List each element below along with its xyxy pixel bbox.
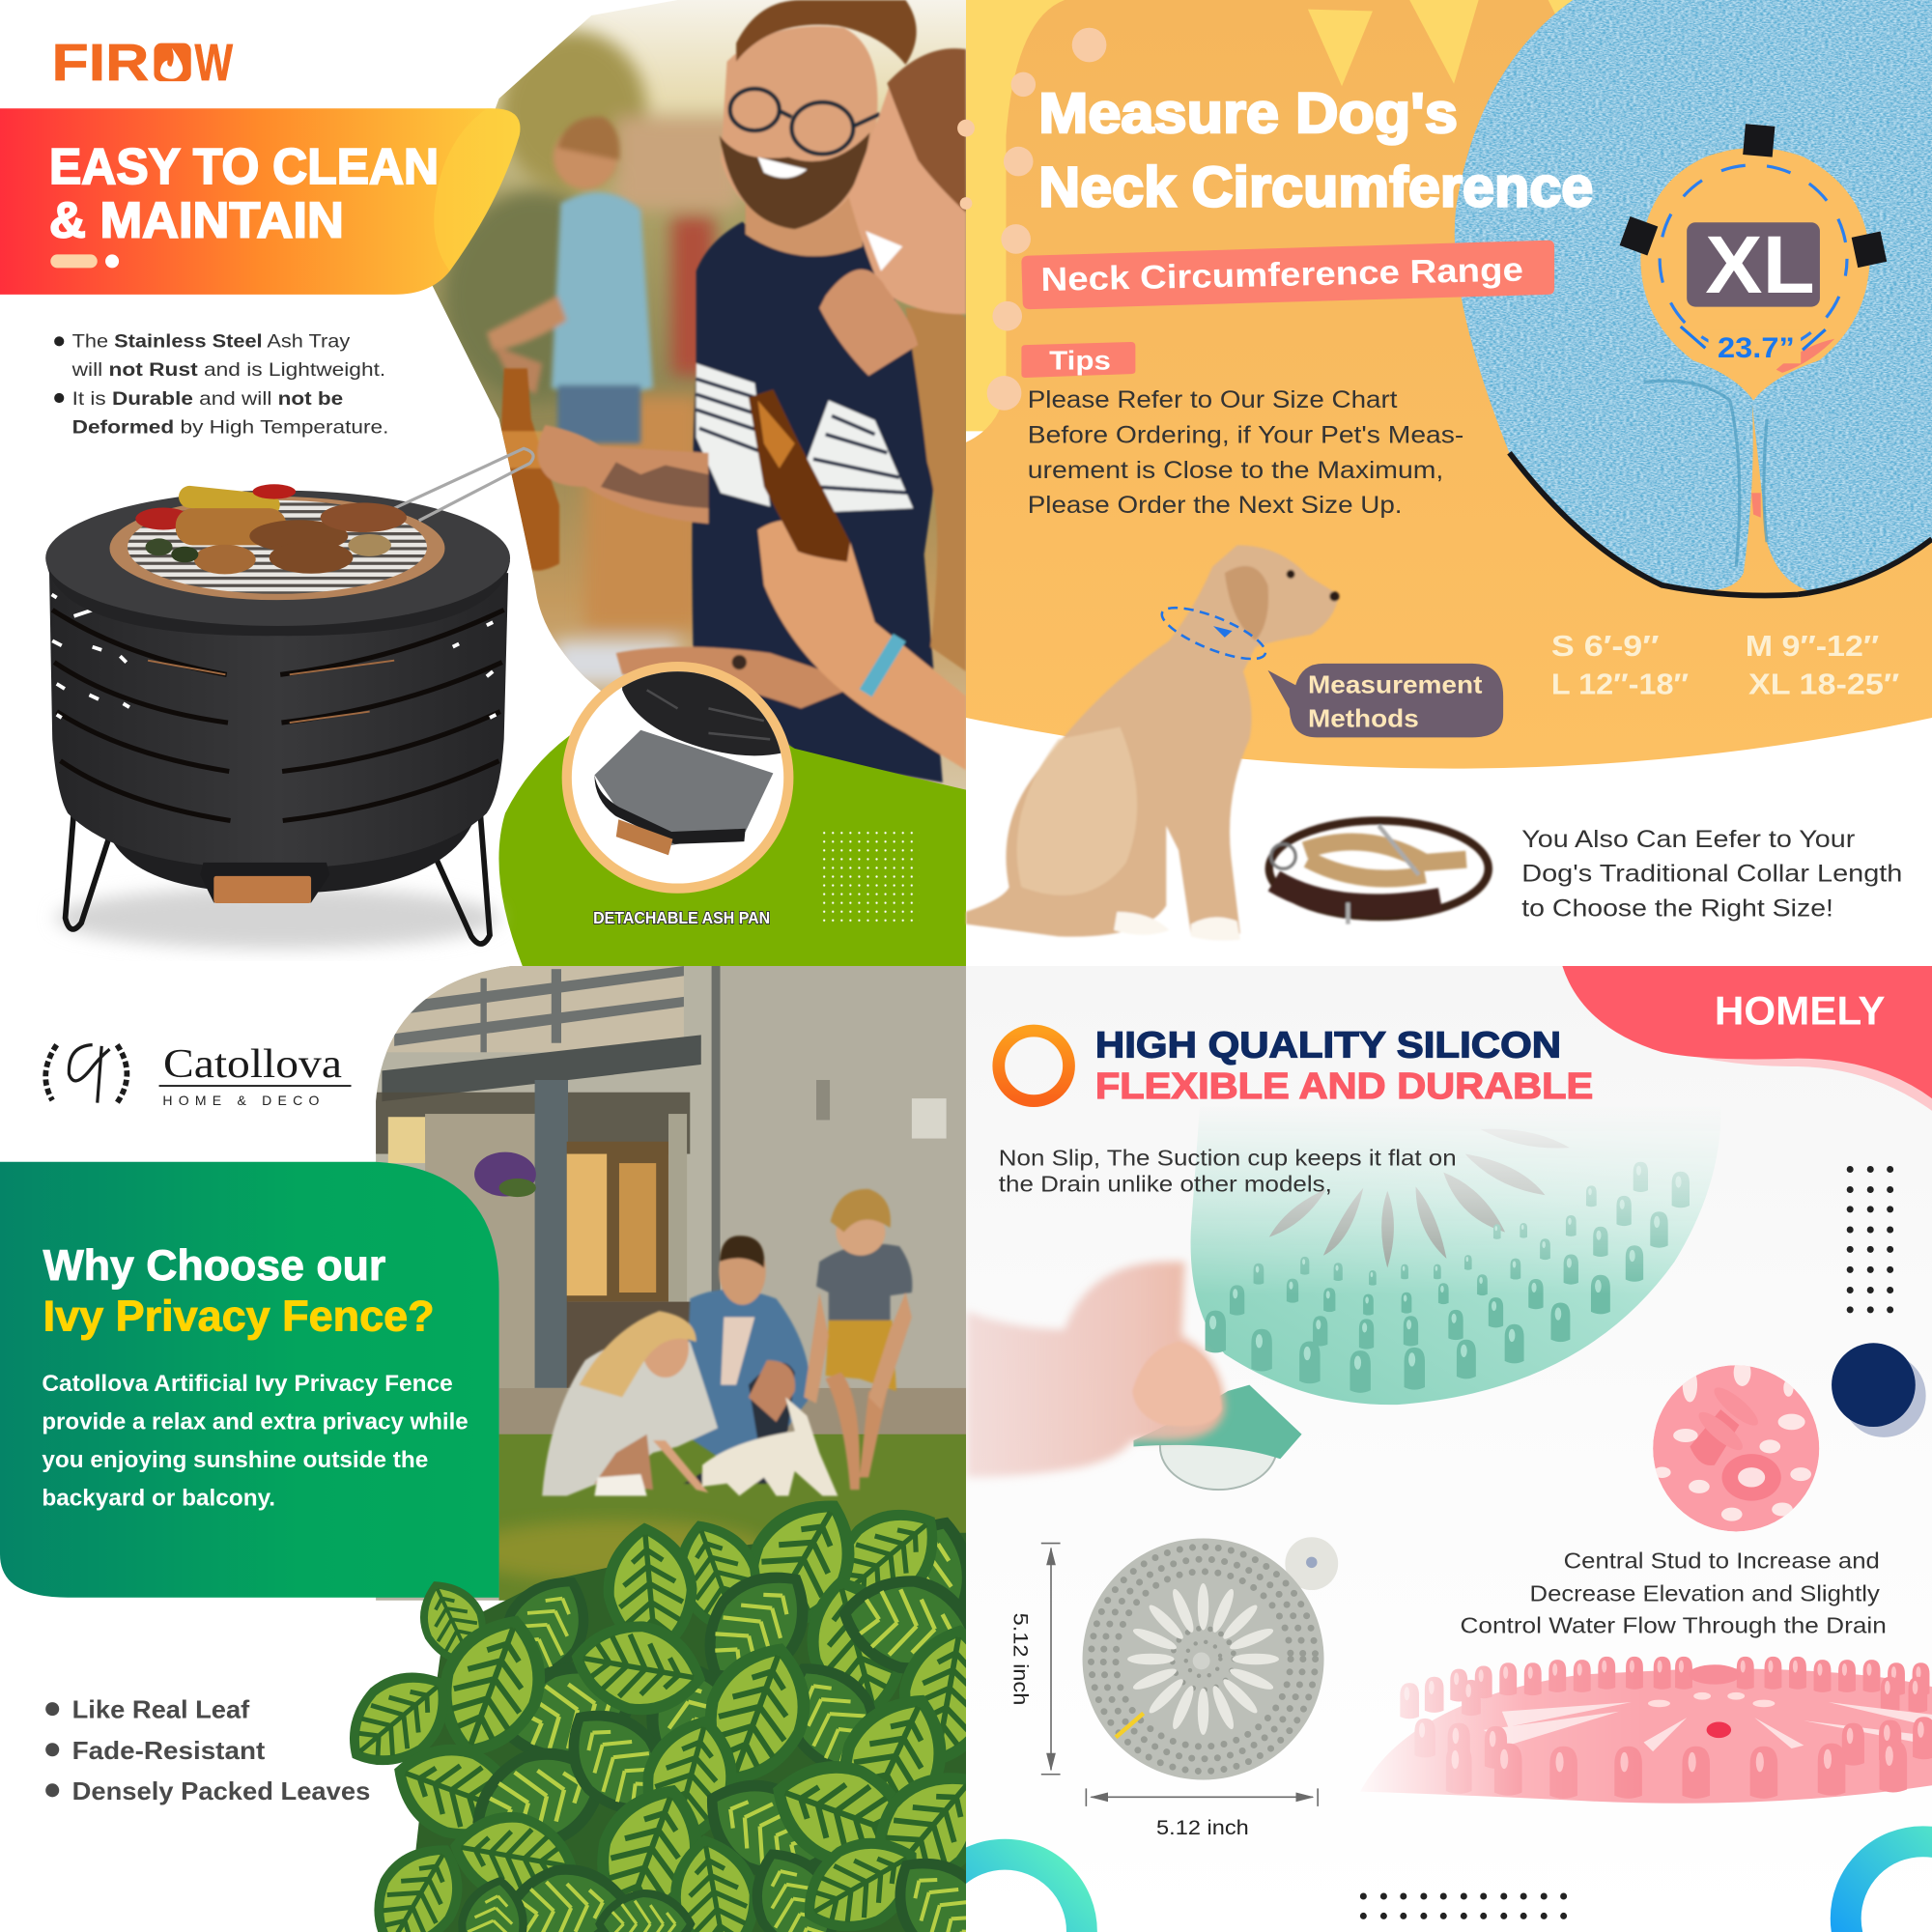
inset: detachable ash pan [562,662,793,894]
card body: Catollova Artificial Ivy Privacy Fence [42,1371,453,1396]
food on grill [135,484,407,574]
wooden handle [200,863,329,903]
title accent [50,254,119,268]
text: traditional collar note: You Also Can Eefer to Your [1521,826,1855,853]
text: tips body [1028,386,1463,519]
dimension: horizontal 5.12 inch: 5.12 inch [1156,1815,1249,1839]
text: feature list [54,331,388,438]
photo: hand lifting strainer [966,1262,1302,1490]
title [1097,1031,1592,1099]
foreground people [500,0,966,782]
card body [42,1371,469,1511]
callout: measurement methods: Methods [1308,706,1419,733]
title: FLEXIBLE AND DURABLE [1095,1065,1593,1107]
dimension: vertical 5.12 inch: 5.12 inch [1009,1613,1034,1705]
product: fire pit with grill [45,448,533,949]
size label XL: XL [1705,219,1815,310]
monogram wreath [45,1045,127,1103]
size chart: S 6′-9″ [1551,630,1660,663]
dashed neck measure [1156,598,1271,668]
dot grid [820,827,920,923]
logo: Firow [52,35,233,92]
beer bottle left [500,368,559,571]
photo: teal strainer [1191,1101,1720,1405]
decorative gradient ring left [927,1855,1082,1932]
text: tips body: Please Order the Next Size Up. [1028,492,1403,519]
logo: Catollova: Catollova [163,1041,342,1087]
text: suction note [999,1146,1457,1196]
text: feature list: will not Rust and is Lightweight. [71,359,385,381]
text: central stud note: Decrease Elevation and Slightly [1530,1581,1880,1606]
dashed measuring line [1660,165,1847,353]
tag: tips: Tips [1049,346,1111,376]
banner: title [0,108,520,295]
card body: provide a relax and extra privacy while [42,1409,469,1435]
title: HIGH QUALITY SILICON [1095,1024,1561,1065]
title text: & MAINTAIN [49,193,344,249]
title [1038,82,1593,219]
dimension: horizontal 5.12 inch [1086,1788,1318,1839]
corner shape: brand [1562,966,1932,1111]
logo: Firow: O [154,35,191,92]
measurement 23.7 [1681,327,1826,364]
text: central stud note: Control Water Flow Through the Drain [1460,1613,1887,1638]
text: traditional collar note: to Choose the Right Size! [1521,895,1833,922]
product: blue cushion collar [1455,0,1932,596]
corner shape: brand: HOMELY [1715,988,1886,1034]
title text [49,139,439,249]
title: Measure Dog's [1038,82,1458,145]
panel: dog collar [957,0,1932,966]
photo: grey strainer [1083,1537,1338,1779]
logo: Catollova [45,1041,352,1108]
text: central stud note [1460,1548,1887,1638]
shape: green corner [498,709,966,966]
lifestyle photo: friends with beer [401,0,966,801]
logo: Firow: FIR [52,35,149,92]
text: feature list: The Stainless Steel Ash Tray [72,331,350,353]
dot rows [1360,1893,1567,1919]
title text: EASY TO CLEAN [49,139,439,195]
detail: central stud [1653,1359,1819,1531]
logo: Firow: W [195,35,233,92]
text: traditional collar note: Dog's Traditional Collar Length [1521,861,1902,888]
size chart: M 9″-12″ [1746,630,1880,663]
tag: tips [1021,342,1135,378]
text: tips body: urement is Close to the Maximum, [1028,457,1443,484]
dog photo [966,545,1339,941]
woman laughing [757,48,966,770]
dimension: vertical 5.12 inch [1009,1544,1061,1775]
size chart [1551,630,1900,701]
straps [1620,124,1887,268]
man in navy t-shirt [537,0,943,782]
callout: measurement methods [1268,664,1503,737]
panel: ivy privacy fence [0,966,1019,1932]
text: feature list: It is Durable and will not be [72,388,343,410]
card title: Ivy Privacy Fence? [43,1293,435,1341]
dot column [1847,1166,1893,1313]
background: yellow strip [966,0,1932,431]
text: suction note: Non Slip, The Suction cup keeps it flat on [999,1146,1457,1171]
text: tips body: Before Ordering, if Your Pet's Meas- [1028,422,1463,449]
lifestyle photo: family in garden [376,966,966,1601]
caption: detachable ash pan: DETACHABLE ASH PAN [593,908,770,927]
text: central stud note: Central Stud to Increase and [1564,1548,1880,1574]
icon: orange ring [999,1031,1069,1101]
text: traditional collar note [1521,826,1902,922]
panel: fire pit [0,0,966,966]
text: suction note: the Drain unlike other models, [999,1171,1332,1196]
banner: neck circumference range: Neck Circumference Range [1040,252,1523,298]
title: Neck Circumference [1038,156,1593,219]
text: feature list: Deformed by High Temperature. [72,416,388,438]
family figures [542,1189,912,1495]
size chart: L 12″-18″ [1551,668,1689,701]
size chart: XL 18-25″ [1748,668,1900,701]
card title: Why Choose our [43,1242,385,1290]
artificial ivy leaves [326,1475,1019,1932]
banner: neck circumference range [1021,241,1554,309]
decorative bubbles [957,28,1106,411]
background: orange curved field [966,0,1932,769]
panel: why choose card [0,1162,499,1598]
bullet list: Fade-Resistant [72,1738,266,1765]
text: tips body: Please Refer to Our Size Chart [1028,386,1398,413]
bullet list: Densely Packed Leaves [72,1778,370,1805]
bunting triangles [1308,0,1588,86]
card body: you enjoying sunshine outside the [42,1447,428,1472]
bullet list: Like Real Leaf [72,1697,250,1724]
beer bottle right [749,389,850,562]
measurement 23.7: 23.7” [1718,332,1795,364]
photo: pink strainer [1360,1657,1932,1804]
product: leather collars [1269,820,1489,924]
panel: drain strainer [927,966,1932,1932]
decorative navy circle [1832,1343,1926,1437]
bullet list [45,1697,370,1805]
callout: measurement methods: Measurement [1308,671,1483,698]
card title [43,1242,435,1341]
card body: backyard or balcony. [42,1486,275,1511]
logo: Catollova: HOME & DECO [162,1093,319,1108]
decorative gradient ring right [1846,1841,1932,1932]
